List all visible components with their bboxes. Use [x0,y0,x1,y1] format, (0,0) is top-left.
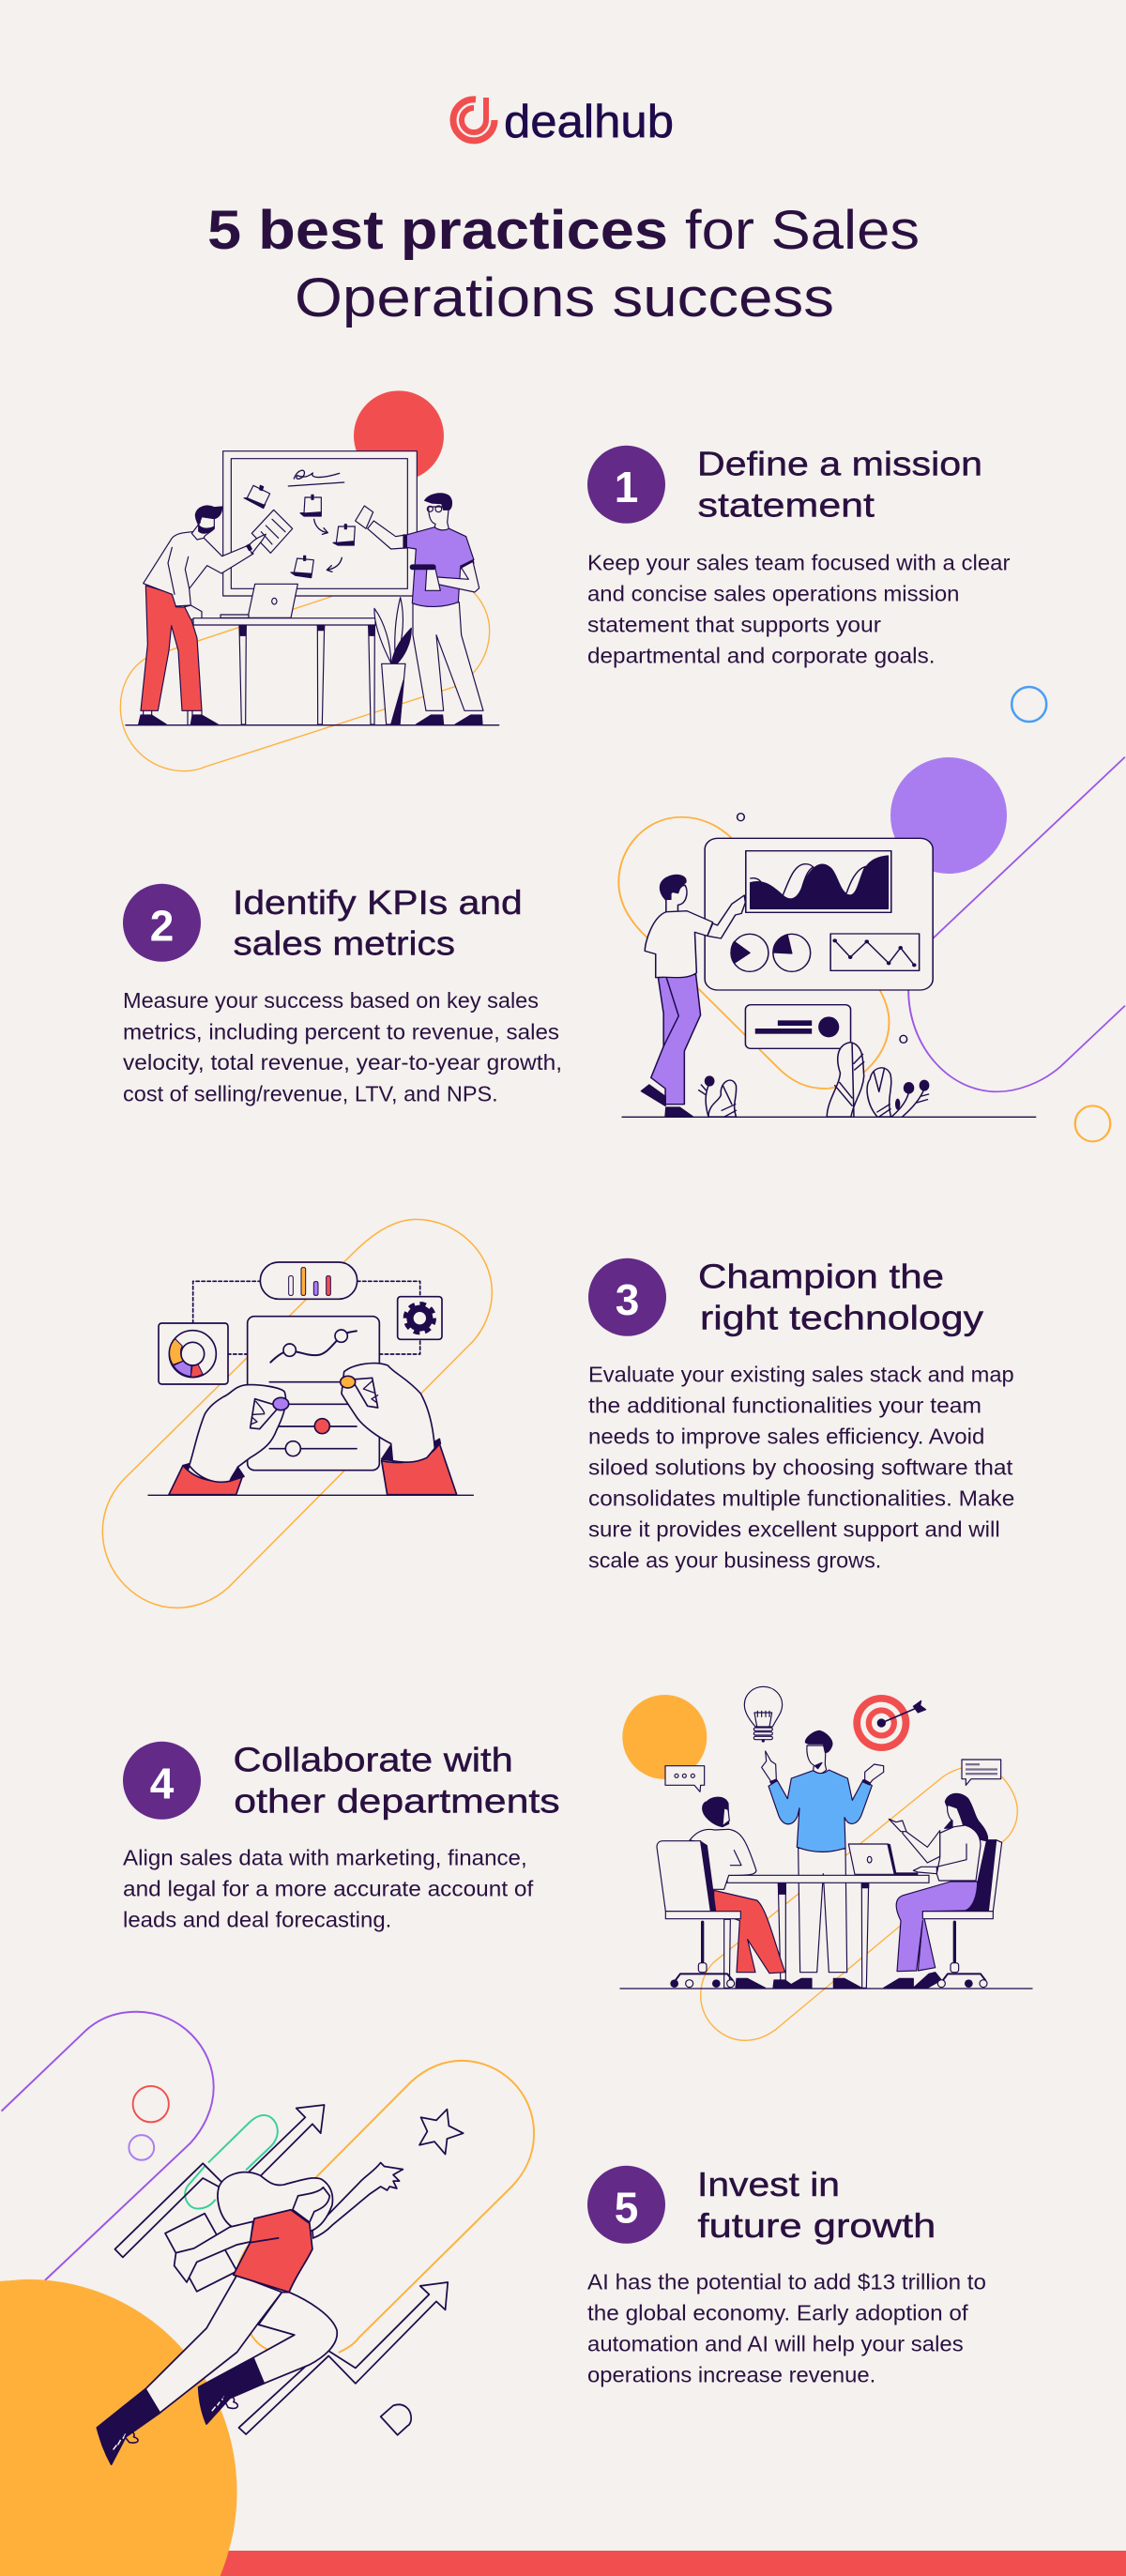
left hand [169,1385,289,1495]
speech bubble right [962,1760,1001,1785]
pill bar chart [260,1262,358,1299]
person [641,875,745,1117]
heading 3 [698,1258,983,1337]
heading 5 [697,2165,936,2245]
number badge 1: 1 [615,463,638,511]
body 3 [588,1363,1014,1573]
body 1: statement that supports your [587,612,881,636]
heading 1: Define a mission [697,445,982,483]
plants [699,1043,929,1117]
heading 2: Identify KPIs and [233,883,523,922]
illustration 4: team meeting [620,1686,1032,2040]
heading 2 [233,883,523,963]
small card [745,1005,851,1048]
orange loop [701,1768,1017,2040]
big orange circle [0,2279,237,2576]
title: 5 best practices [207,200,668,261]
green loop [185,2115,278,2209]
floor line [620,1987,1032,1990]
body 4: and legal for a more accurate account of [123,1877,534,1901]
body 5: AI has the potential to add $13 trillion to [587,2269,986,2294]
purple circle [890,757,1007,874]
title: Operations success [295,267,834,328]
upper growth arrow [114,2105,325,2257]
orange loop [236,2061,534,2353]
heading 5: future growth [698,2206,936,2245]
number badge 4: 4 [150,1760,175,1808]
number badge 1 [587,446,665,524]
step 3 text block [588,1258,1014,1573]
body 3: needs to improve sales efficiency. Avoid [588,1425,984,1449]
rounded shape [381,2404,411,2435]
heading 4 [233,1740,560,1821]
orange circle [622,1695,707,1779]
body 2 [123,988,562,1105]
title [207,200,920,328]
speech bubble left [665,1766,705,1791]
illustration 2: person at dashboard [618,757,1125,1141]
floor line [622,1115,1036,1119]
red circle [354,390,444,480]
seated woman [884,1793,1002,1988]
seated man [657,1797,796,1988]
illustration 3: hands on technology dashboard [102,1219,492,1608]
body 3: consolidates multiple functionalities. Make [588,1486,1014,1511]
gear card [398,1297,442,1339]
donut chart card [159,1323,228,1384]
illustration 1: team at whiteboard [120,390,499,771]
orange loop [618,817,890,1089]
body 3: Evaluate your existing sales stack and map [588,1363,1014,1387]
light bulb [744,1686,783,1743]
dashboard panel [705,838,933,990]
body 5: automation and AI will help your sales [587,2332,964,2356]
desk and laptop [188,584,375,725]
body 5: the global economy. Early adoption of [587,2300,968,2324]
number badge 5: 5 [615,2183,638,2232]
whiteboard [223,451,417,622]
body 4: leads and deal forecasting. [123,1908,391,1932]
target with arrow [853,1695,926,1751]
body 1: Keep your sales team focused with a clear [587,550,1011,574]
man on right [356,494,483,724]
dashed connectors [193,1281,420,1354]
illustration 5: woman running up growth arrows [0,2012,534,2576]
number badge 3 [588,1258,666,1336]
purple lines [908,757,1125,1091]
number badge 3: 3 [616,1275,639,1324]
table line [148,1493,473,1497]
step 1 text block [587,445,1011,668]
body 1 [587,550,1011,668]
orange stadium [102,1219,492,1608]
main card with sliders [248,1317,379,1471]
heading 5: Invest in [697,2165,840,2203]
body 4 [123,1846,534,1932]
man on left [139,506,293,724]
plant [374,598,411,724]
body 4: Align sales data with marketing, finance, [123,1846,527,1870]
body 1: departmental and corporate goals. [587,644,935,668]
running woman [97,2163,403,2464]
step 5 text block [587,2165,986,2387]
purple loop [2,2012,214,2280]
body 2: metrics, including percent to revenue, sales [123,1019,559,1044]
number badge 5 [587,2166,665,2244]
body 3: the additional functionalities your team [588,1394,981,1418]
heading 2: sales metrics [233,924,455,963]
body 5: operations increase revenue. [587,2363,875,2387]
body 3: sure it provides excellent support and will [588,1517,1000,1542]
bottom red bar [188,2551,1126,2576]
orange ring [1075,1105,1110,1141]
blue ring [1012,687,1046,722]
heading 4: other departments [234,1782,560,1821]
heading 1: statement [698,486,875,525]
body 2: velocity, total revenue, year-to-year growth, [123,1050,562,1075]
lower growth arrow [238,2282,448,2434]
number badge 2: 2 [150,901,174,950]
standing man in blue [762,1730,884,1988]
desk and laptop [727,1844,929,1988]
heading 3: right technology [700,1299,983,1337]
body 1: and concise sales operations mission [587,582,959,606]
floor line [126,724,499,727]
step 4 text block [123,1740,560,1932]
right hand [341,1364,457,1495]
decorative rings [129,2086,169,2160]
heading 4: Collaborate with [233,1740,513,1778]
heading 3: Champion the [698,1258,944,1296]
small rings [738,814,907,1043]
number badge 4 [123,1742,201,1820]
star [419,2110,464,2155]
body 2: cost of selling/revenue, LTV, and NPS. [123,1081,498,1105]
body 3: scale as your business grows. [588,1548,881,1573]
body 5 [587,2269,986,2387]
orange loop [120,593,490,771]
logo: dealhub: dealhub [504,97,674,147]
carton [165,2214,237,2292]
title: for Sales [685,200,920,261]
number badge 2 [123,884,201,962]
step 2 text block [123,883,562,1105]
body 2: Measure your success based on key sales [123,988,539,1013]
body 3: siloed solutions by choosing software that [588,1456,1013,1480]
heading 1 [697,445,982,525]
